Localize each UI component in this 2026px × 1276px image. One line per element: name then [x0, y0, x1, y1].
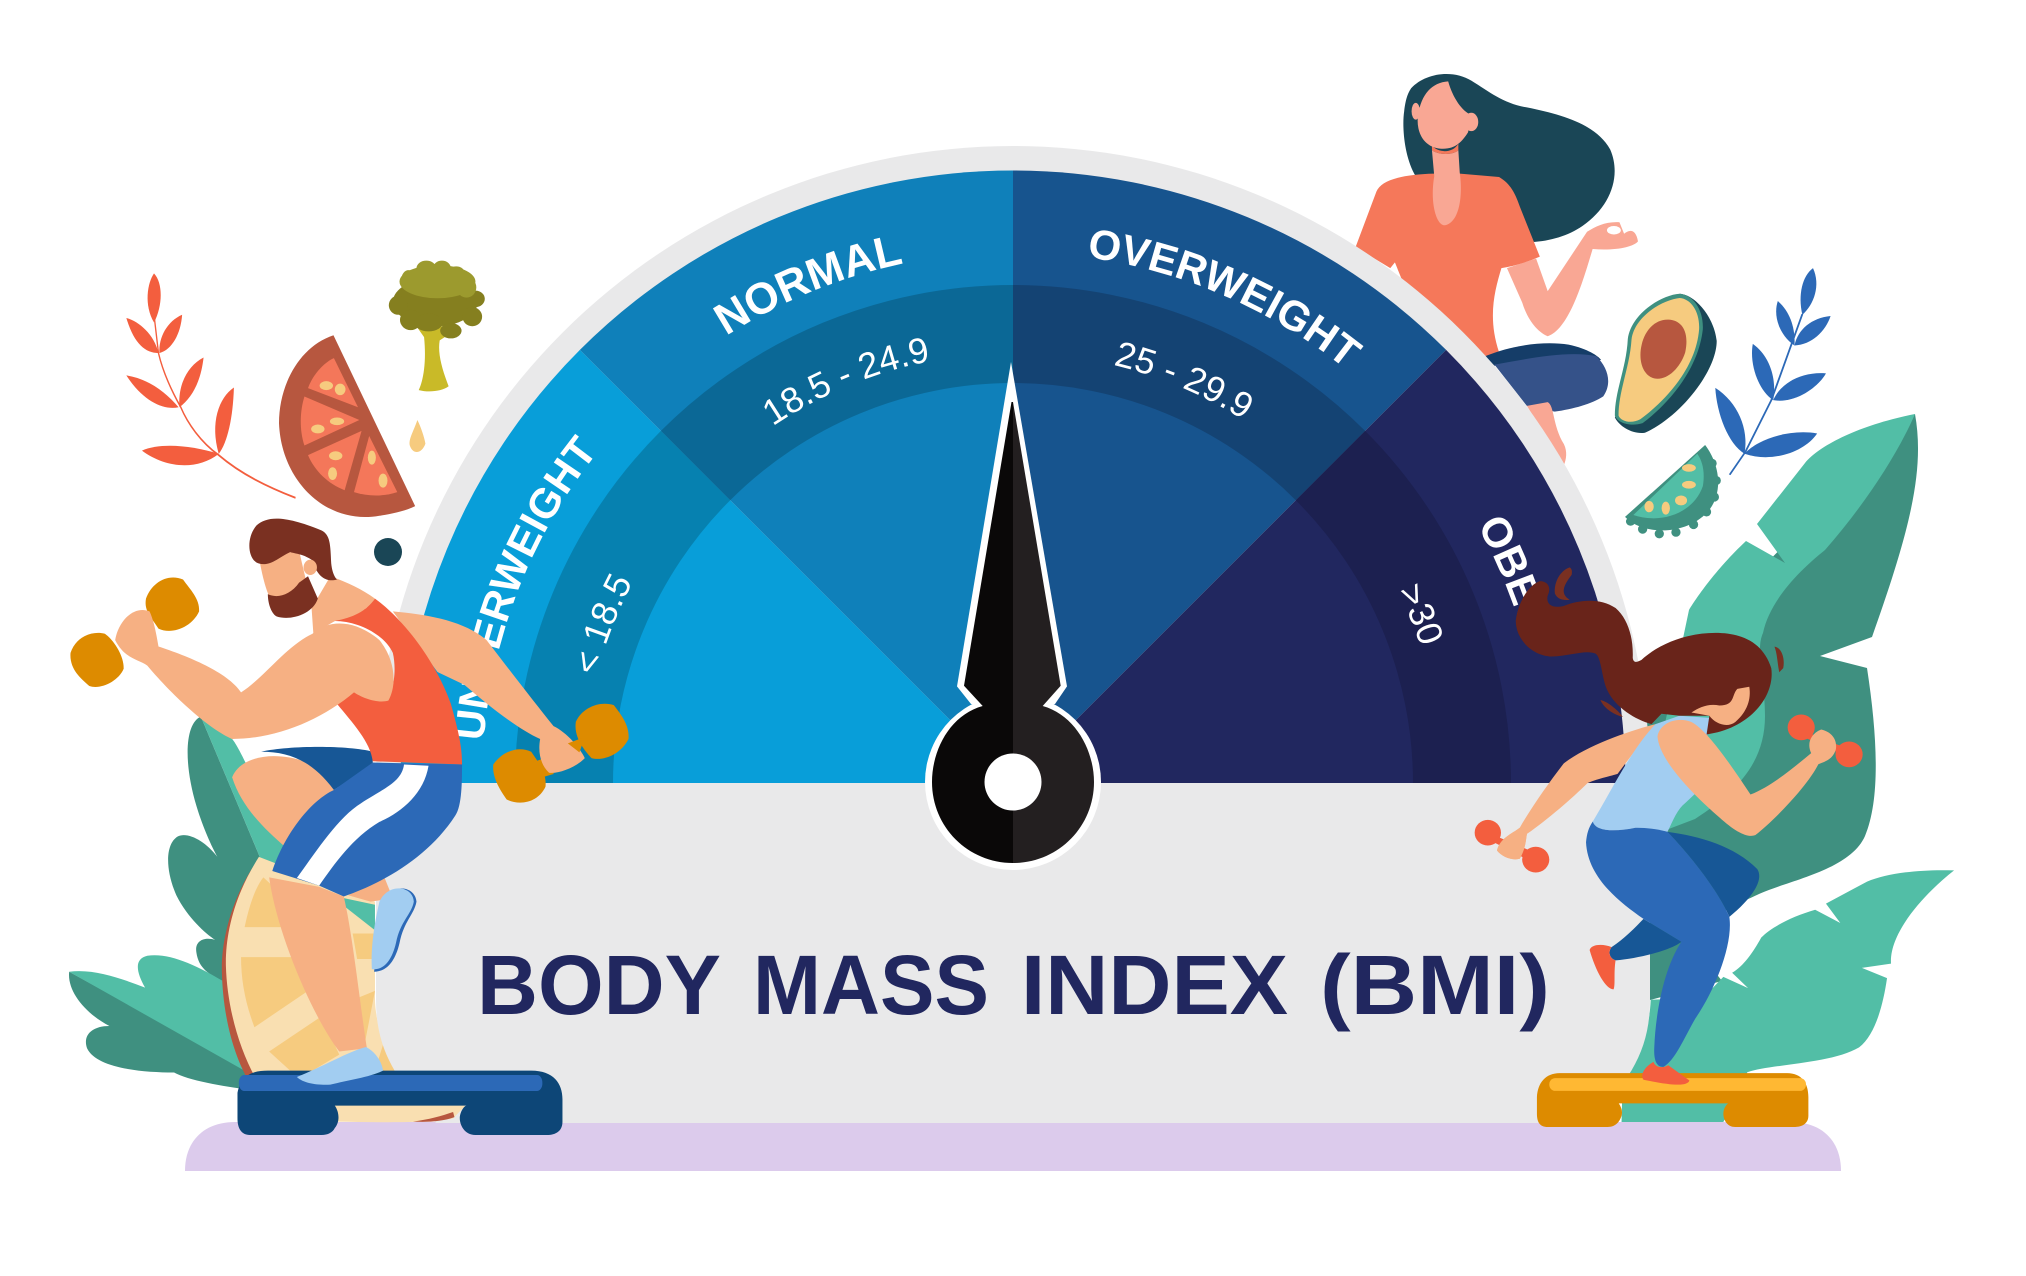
range label: 25 to 29.9: 25 - 29.9 — [1114, 342, 1252, 416]
title: BODY — [477, 938, 721, 1032]
blue sprig — [1715, 268, 1831, 475]
blue exercise step — [237, 1047, 562, 1135]
range label: over 30: >30 — [1400, 583, 1442, 643]
gauge needle — [925, 362, 1101, 870]
dark berry dot — [374, 538, 402, 566]
category label: overweight: OVERWEIGHT — [1090, 230, 1364, 364]
broccoli — [389, 261, 485, 391]
tomato slice — [279, 335, 415, 517]
title: (BMI) — [1320, 938, 1550, 1032]
yellow exercise step — [1537, 1062, 1808, 1127]
gauge: dial segments — [400, 170, 1626, 783]
meditating woman — [1356, 74, 1638, 465]
range label: 18.5 to 24.9: 18.5 - 24.9 — [764, 338, 928, 425]
red sprig — [126, 273, 296, 498]
gauge backing panel — [376, 146, 1650, 1123]
woman exercising with dumbbells — [1475, 567, 1863, 1067]
oil drop — [410, 420, 425, 452]
plant: right foliage, lower leaf — [1622, 870, 1954, 1122]
category label: underweight: UNDERWEIGHT — [457, 434, 592, 738]
man exercising — [70, 519, 629, 1051]
lemon slice — [222, 857, 453, 1122]
title — [477, 938, 1550, 1032]
title: MASS — [753, 938, 989, 1032]
base platform — [185, 1122, 1841, 1171]
title: INDEX — [1021, 938, 1288, 1032]
melon slice — [1625, 445, 1721, 538]
category label: normal: NORMAL — [713, 238, 903, 334]
plant: right foliage, upper leaves — [1630, 414, 1918, 1000]
plant: left foliage — [69, 717, 286, 1090]
category label: obese: OBESE — [1482, 518, 1536, 606]
avocado — [1615, 294, 1717, 433]
range label: under 18.5: < 18.5 — [581, 573, 630, 672]
